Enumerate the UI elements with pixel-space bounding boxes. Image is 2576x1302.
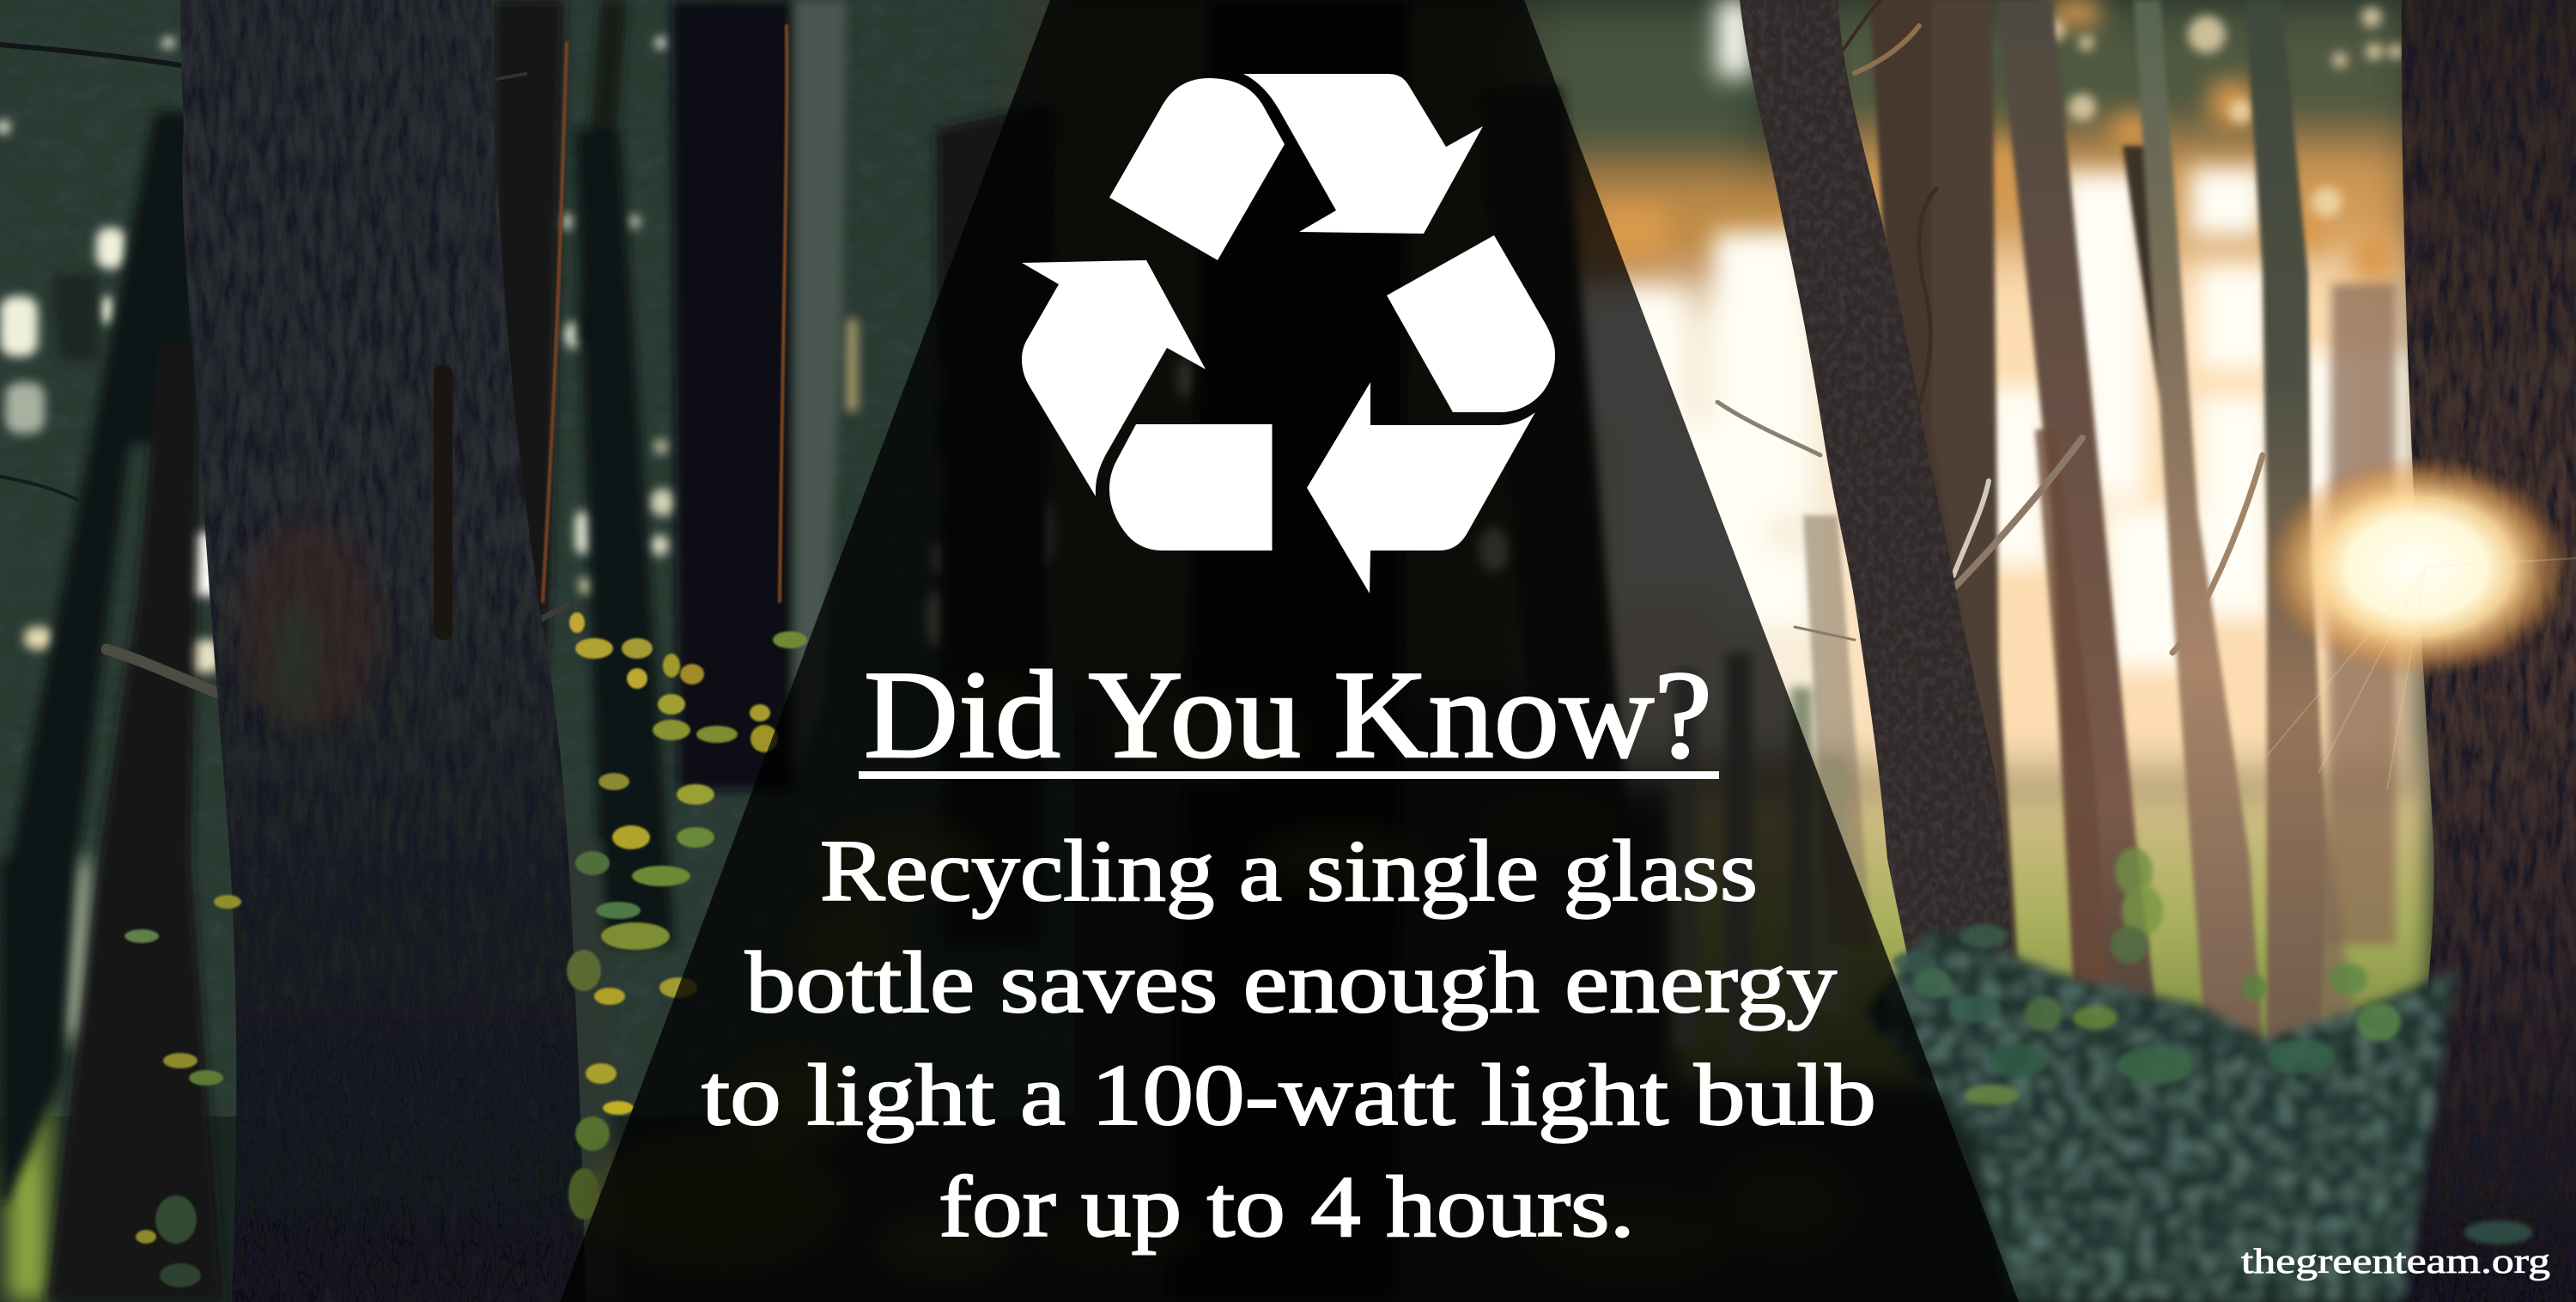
undergrowth foliage [125, 612, 2533, 1302]
left main tree [180, 0, 586, 1302]
arrow head: top right [1243, 74, 1483, 234]
arrow segment: bottom left [1109, 424, 1273, 551]
body text [702, 823, 1876, 1256]
orange rim light [543, 26, 787, 601]
body text: bottle saves enough energy [745, 934, 1837, 1031]
far right tree [2380, 0, 2576, 1302]
arrow head: bottom right [1307, 382, 1535, 593]
left sky bokeh [0, 37, 858, 672]
pale green low left [7, 859, 93, 1302]
website credit: thegreenteam.org [2241, 1241, 2550, 1281]
icon: recycling symbol [1022, 74, 1555, 593]
sun flare [2263, 455, 2576, 790]
arrow head: left [1022, 260, 1206, 496]
arrow segment: upper left [1109, 78, 1285, 260]
body text: Recycling a single glass [820, 823, 1758, 920]
body text: for up to 4 hours. [939, 1159, 1635, 1256]
pale trunks lower-right of triangle [1674, 653, 1846, 1065]
heading: Did You Know?: Did You Know? [864, 645, 1712, 784]
yellow leaves left of triangle [125, 612, 807, 1287]
dim bokeh behind triangle [926, 352, 1510, 648]
olive foliage behind triangle [584, 678, 1855, 1280]
body text: to light a 100-watt light bulb [702, 1047, 1876, 1144]
right foreground tree [1740, 0, 2011, 1031]
branches [0, 0, 2520, 692]
dark triangle panel [560, 0, 2019, 1302]
arrow segment: right [1387, 235, 1555, 412]
pine canopy left [0, 0, 1073, 1116]
